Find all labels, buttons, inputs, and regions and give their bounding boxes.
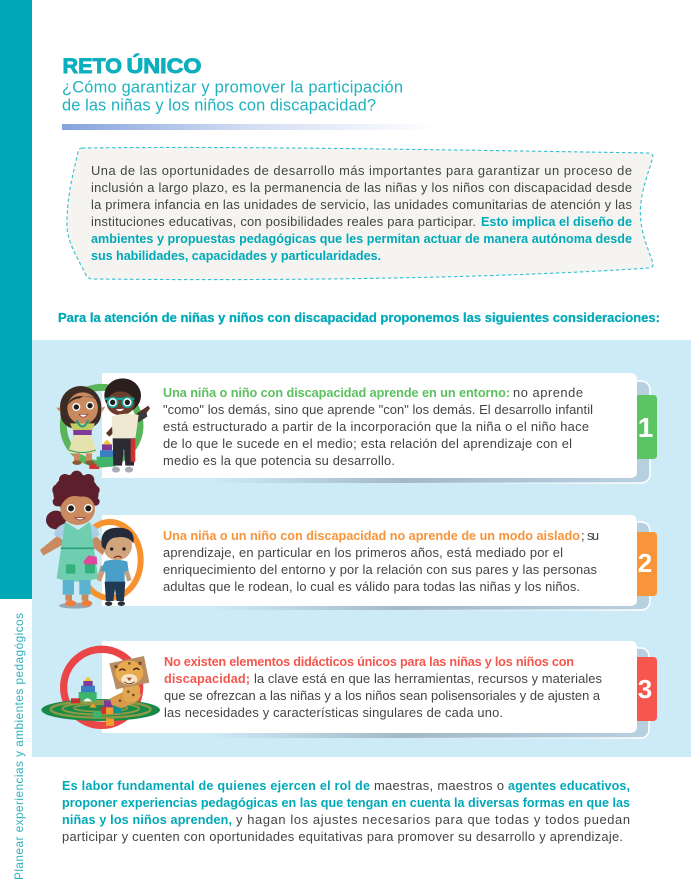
card 2 text: aprendizaje, en particular en los primeros años, está mediado por el — [163, 545, 563, 560]
card 1 — [102, 373, 657, 483]
card 2 text — [163, 528, 599, 594]
card 2 text: adultas que le rodean, lo cual es válido para todas las niñas y los niños. — [163, 579, 580, 594]
card 1 text — [163, 385, 593, 468]
intro text: sus habilidades, capacidades y particularidades. — [91, 249, 381, 263]
card 1 text: está estructurado a partir de la incorporación que la niña o el niño hace — [163, 419, 589, 434]
intro text: Esto implica el diseño de — [481, 215, 632, 229]
closing paragraph: Es labor fundamental de quienes ejercen el rol de — [62, 779, 370, 793]
title block — [62, 53, 403, 114]
illustration: two children with blocks — [56, 378, 150, 473]
card 2 text: ; — [581, 528, 585, 543]
card front — [102, 641, 637, 733]
number tab 1: 1 — [638, 412, 653, 443]
card 1 text: "como" los demás, sino que aprende "con" los demás. El desarrollo infantil — [163, 402, 593, 417]
card 3 text: la clave está en que las herramientas, recursos y materiales — [254, 671, 602, 686]
number tab 3: 3 — [638, 674, 652, 704]
card 3 text: No existen elementos didácticos únicos para las niñas y los niños con — [164, 655, 574, 669]
closing paragraph: participar y cuenten con oportunidades equitativas para promover su desarrollo y aprendizaje. — [62, 829, 623, 844]
card back — [210, 381, 650, 483]
jaguar — [109, 656, 149, 708]
girl — [56, 386, 105, 465]
card 1 text: medio es la que potencia su desarrollo. — [163, 453, 395, 468]
heading: RETO — [62, 54, 122, 78]
card front — [102, 373, 637, 478]
intro text: ambientes y propuestas pedagógicas que les permitan actuar de manera autónoma desde — [91, 232, 632, 246]
green ring — [63, 387, 140, 464]
intro text: instituciones educativas, con posibilidades reales para participar. — [91, 214, 476, 229]
woman — [40, 471, 107, 609]
gradient divider bar — [62, 124, 437, 130]
illustration: jaguar on rug with blocks — [41, 649, 160, 726]
panel: intro callout — [67, 147, 653, 280]
number tab 2: 2 — [638, 548, 652, 578]
subtitle — [62, 79, 403, 114]
intro text: Una de las oportunidades de desarrollo más importantes para garantizar un proceso de — [91, 163, 632, 178]
illustration: woman and boy — [40, 471, 141, 609]
closing paragraph: niñas y los niños aprenden, — [62, 813, 232, 827]
number tab 1 — [630, 395, 657, 459]
card back — [210, 522, 650, 610]
subtitle: de las niñas y los niños con discapacidad? — [62, 96, 376, 114]
rug — [41, 699, 160, 721]
red ring — [64, 649, 140, 725]
closing paragraph: maestras, maestros o — [374, 778, 504, 793]
boy — [97, 528, 134, 606]
card 1 text: Una niña o niño con discapacidad aprende en un entorno: — [163, 386, 510, 400]
closing paragraph: proponer experiencias pedagógicas en las que tengan en cuenta la diversas formas en que las — [62, 796, 630, 810]
card 1 text: de lo que le sucede en el medio; esta relación del aprendizaje con el — [163, 436, 572, 451]
card 1 text: no aprende — [513, 385, 583, 400]
section intro heading: Para la atención de niñas y niños con discapacidad proponemos las siguientes consideraciones: — [58, 310, 660, 325]
card back — [210, 648, 649, 738]
panel: light blue band — [32, 340, 691, 757]
card 2 text: su — [587, 528, 599, 543]
subtitle: ¿Cómo garantizar y promover la participación — [62, 79, 403, 97]
closing paragraph — [62, 778, 630, 844]
card 3 — [102, 641, 657, 738]
number tab 2 — [630, 532, 657, 596]
blocks — [89, 440, 115, 469]
boy with glasses — [104, 378, 150, 473]
card 3 text: discapacidad; — [164, 672, 250, 686]
block tower — [71, 676, 121, 726]
closing paragraph: y hagan los ajustes necesarios para que todas y todos puedan — [236, 812, 630, 827]
orange ring — [79, 522, 141, 598]
intro text — [91, 163, 632, 263]
heading — [62, 53, 202, 78]
sidebar vertical label: Planear experiencias y ambientes pedagógicos — [12, 613, 26, 880]
card 3 text: las necesidades y características singulares de cada uno. — [164, 705, 503, 720]
intro text: la primera infancia en las unidades de servicio, las unidades comunitarias de atención y las — [91, 197, 632, 212]
number tab 3 — [630, 657, 657, 721]
sidebar — [0, 0, 32, 599]
card 3 text — [164, 655, 602, 720]
closing paragraph: agentes educativos, — [508, 779, 630, 793]
card 2 — [102, 515, 657, 610]
card 2 text: Una niña o un niño con discapacidad no aprende de un modo aislado — [163, 529, 580, 543]
card 3 text: que se ofrezcan a las niñas y a los niños sean polisensoriales y de ajusten a — [164, 688, 601, 703]
intro text: inclusión a largo plazo, es la permanencia de las niñas y los niños con discapacidad desde — [91, 180, 632, 195]
card front — [102, 515, 637, 606]
heading: ÚNICO — [126, 53, 202, 78]
card 2 text: enriquecimiento del entorno y por la relación con sus pares y las personas — [163, 562, 597, 577]
